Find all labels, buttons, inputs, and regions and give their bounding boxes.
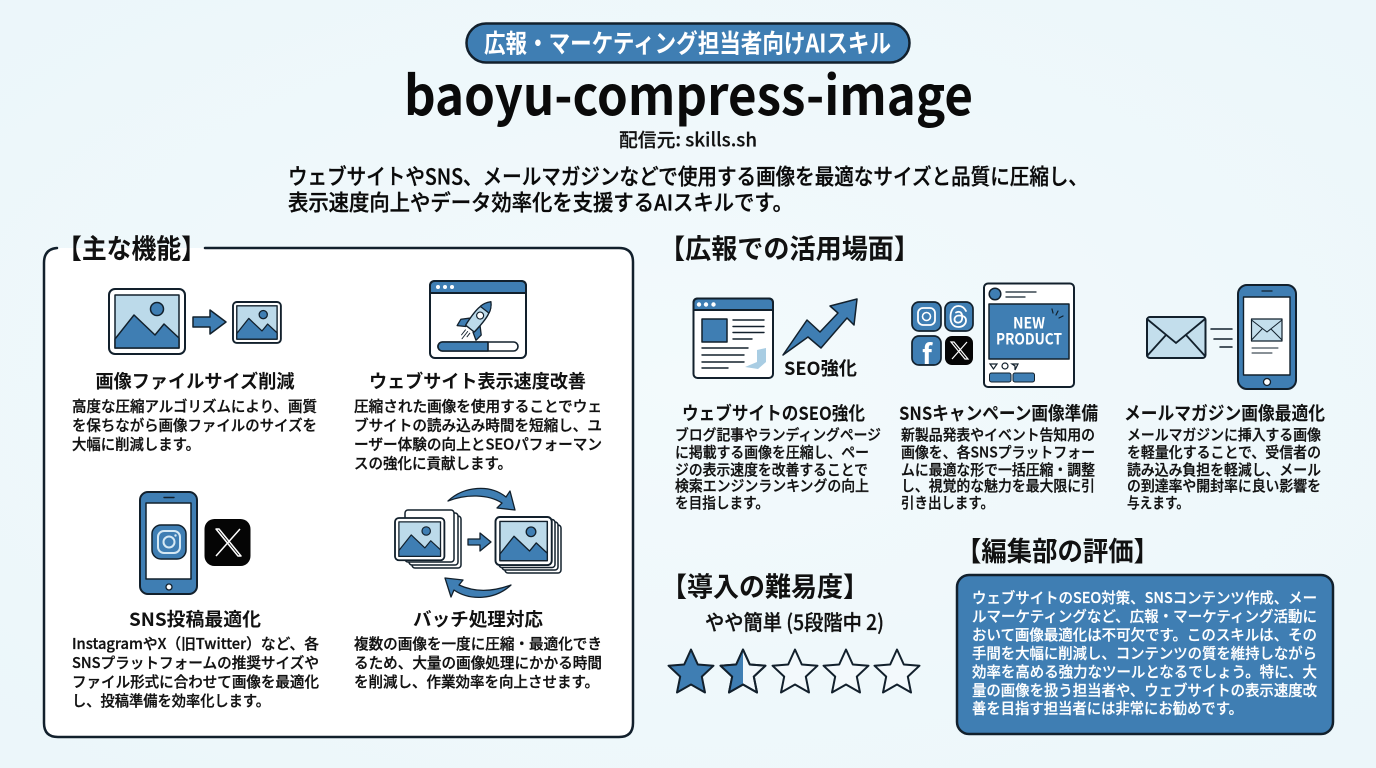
use case: newsletter bbox=[1124, 285, 1325, 513]
feature text: し、投稿準備を効率化します。 bbox=[72, 690, 270, 711]
use case text: 検索エンジンランキングの向上 bbox=[675, 475, 869, 496]
feature text: ーザー体験の向上とSEOパフォーマン bbox=[354, 434, 602, 454]
icon: envelope and phone bbox=[1147, 285, 1296, 389]
feature text: を削減し、作業効率を向上させます。 bbox=[354, 671, 599, 692]
label: SEO: SEO強化 bbox=[784, 355, 857, 381]
feature text: 圧縮された画像を使用することでウェ bbox=[354, 396, 602, 416]
section: difficulty bbox=[661, 566, 920, 692]
feature text: 複数の画像を一度に圧縮・最適化でき bbox=[354, 633, 602, 654]
icon: image compress bbox=[109, 289, 281, 354]
review panel: 手間を大幅に削減し、コンテンツの質を維持しながら bbox=[972, 642, 1317, 664]
source: 配信元: skills.sh bbox=[619, 126, 757, 152]
header bbox=[288, 24, 1088, 218]
use case text: ジの表示速度を改善することで bbox=[675, 459, 868, 480]
review panel bbox=[957, 575, 1333, 734]
use case text bbox=[901, 424, 1095, 513]
use case text: に掲載する画像を圧縮し、ペー bbox=[675, 442, 869, 462]
review panel: ルマーケティングなど、広報・マーケティング活動に bbox=[972, 606, 1317, 626]
feature heading: SNS投稿最適化 bbox=[129, 606, 262, 632]
audience pill: 広報・マーケティング担当者向けAIスキル bbox=[484, 24, 891, 60]
icon: social post bbox=[912, 284, 1074, 387]
review panel: ウェブサイトのSEO対策、SNSコンテンツ作成、メー bbox=[972, 587, 1317, 608]
use case text: の到達率や開封率に良い影響を bbox=[1127, 475, 1321, 496]
section: editorial review bbox=[956, 530, 1333, 734]
panel: main features bbox=[44, 228, 633, 737]
feature: batch bbox=[354, 488, 602, 692]
feature text: スの強化に貢献します。 bbox=[354, 452, 512, 474]
feature text: るため、大量の画像処理にかかる時間 bbox=[354, 652, 602, 673]
review panel: 量の画像を扱う担当者や、ウェブサイトの表示速度改 bbox=[972, 680, 1317, 700]
use case text: 画像を、各SNSプラットフォー bbox=[901, 442, 1095, 462]
feature: SNS bbox=[72, 492, 319, 711]
feature text: 大幅に削減します。 bbox=[72, 434, 200, 454]
use case text: 引き出します。 bbox=[901, 492, 994, 513]
use case text bbox=[675, 424, 881, 513]
use case text: し、視覚的な魅力を最大限に引 bbox=[901, 475, 1095, 496]
description: ウェブサイトやSNS、メールマガジンなどで使用する画像を最適なサイズと品質に圧縮し、 bbox=[288, 160, 1088, 192]
use case text: ブログ記事やランディングページ bbox=[675, 424, 881, 445]
heading: main features: 【主な機能】 bbox=[57, 228, 206, 266]
use case text: を軽量化することで、受信者の bbox=[1127, 442, 1321, 462]
description: 表示速度向上やデータ効率化を支援するAIスキルです。 bbox=[288, 186, 793, 218]
feature: file size reduction bbox=[72, 289, 317, 454]
feature text: 高度な圧縮アルゴリズムにより、画質 bbox=[72, 396, 317, 416]
feature heading: ウェブサイト表示速度改善 bbox=[369, 368, 586, 394]
feature text: を保ちながら画像ファイルのサイズを bbox=[72, 414, 317, 436]
description bbox=[288, 160, 1088, 218]
difficulty label: やや簡単 (5段階中 2) bbox=[705, 607, 884, 637]
icon: social post: NEW bbox=[1013, 312, 1045, 334]
use case text bbox=[1127, 424, 1321, 513]
feature text bbox=[72, 396, 317, 454]
section: PR use cases bbox=[659, 228, 1325, 513]
icon: browser rocket bbox=[430, 281, 526, 358]
use case text: 与えます。 bbox=[1127, 492, 1189, 513]
title: baoyu-compress-image bbox=[404, 52, 973, 131]
feature text: InstagramやX（旧Twitter）など、各 bbox=[72, 633, 319, 654]
feature heading: 画像ファイルサイズ削減 bbox=[96, 368, 295, 394]
heading: difficulty: 【導入の難易度】 bbox=[661, 566, 869, 604]
use case text: 読み込み負担を軽減し、メール bbox=[1127, 459, 1321, 480]
review panel: おいて画像最適化は不可欠です。このスキルは、その bbox=[972, 624, 1317, 645]
use case heading: メールマガジン画像最適化 bbox=[1124, 400, 1325, 426]
use case: SNS campaign bbox=[899, 284, 1098, 513]
use case text: ムに最適な形で一括圧縮・調整 bbox=[901, 459, 1095, 480]
feature text bbox=[354, 633, 602, 692]
star rating bbox=[668, 650, 920, 692]
icon: social post: PRODUCT bbox=[996, 328, 1062, 350]
icon: browser and growth arrow bbox=[694, 298, 857, 381]
heading: editorial review: 【編集部の評価】 bbox=[956, 530, 1159, 569]
icon: phone and social bbox=[140, 492, 250, 594]
feature text: SNSプラットフォームの推奨サイズや bbox=[72, 652, 319, 673]
feature heading: バッチ処理対応 bbox=[413, 606, 543, 632]
use case heading: SNSキャンペーン画像準備 bbox=[899, 400, 1098, 426]
feature text bbox=[72, 633, 319, 711]
use case heading: ウェブサイトのSEO強化 bbox=[682, 400, 865, 426]
use case text: を目指します。 bbox=[675, 492, 769, 513]
feature text: ファイル形式に合わせて画像を最適化 bbox=[72, 671, 319, 692]
icon: batch processing bbox=[395, 488, 561, 597]
use case text: メールマガジンに挿入する画像 bbox=[1127, 424, 1321, 445]
feature text: ブサイトの読み込み時間を短縮し、ユ bbox=[354, 414, 602, 436]
use case text: 新製品発表やイベント告知用の bbox=[901, 424, 1095, 445]
feature: site speed bbox=[354, 281, 602, 474]
review panel: 善を目指す担当者には非常にお勧めです。 bbox=[972, 698, 1243, 718]
heading: use cases: 【広報での活用場面】 bbox=[659, 228, 920, 266]
icon: social post: f bbox=[922, 333, 933, 372]
review panel: 効率を高める強力なツールとなるでしょう。特に、大 bbox=[972, 661, 1317, 682]
use case: SEO bbox=[675, 298, 881, 513]
feature text bbox=[354, 396, 602, 474]
